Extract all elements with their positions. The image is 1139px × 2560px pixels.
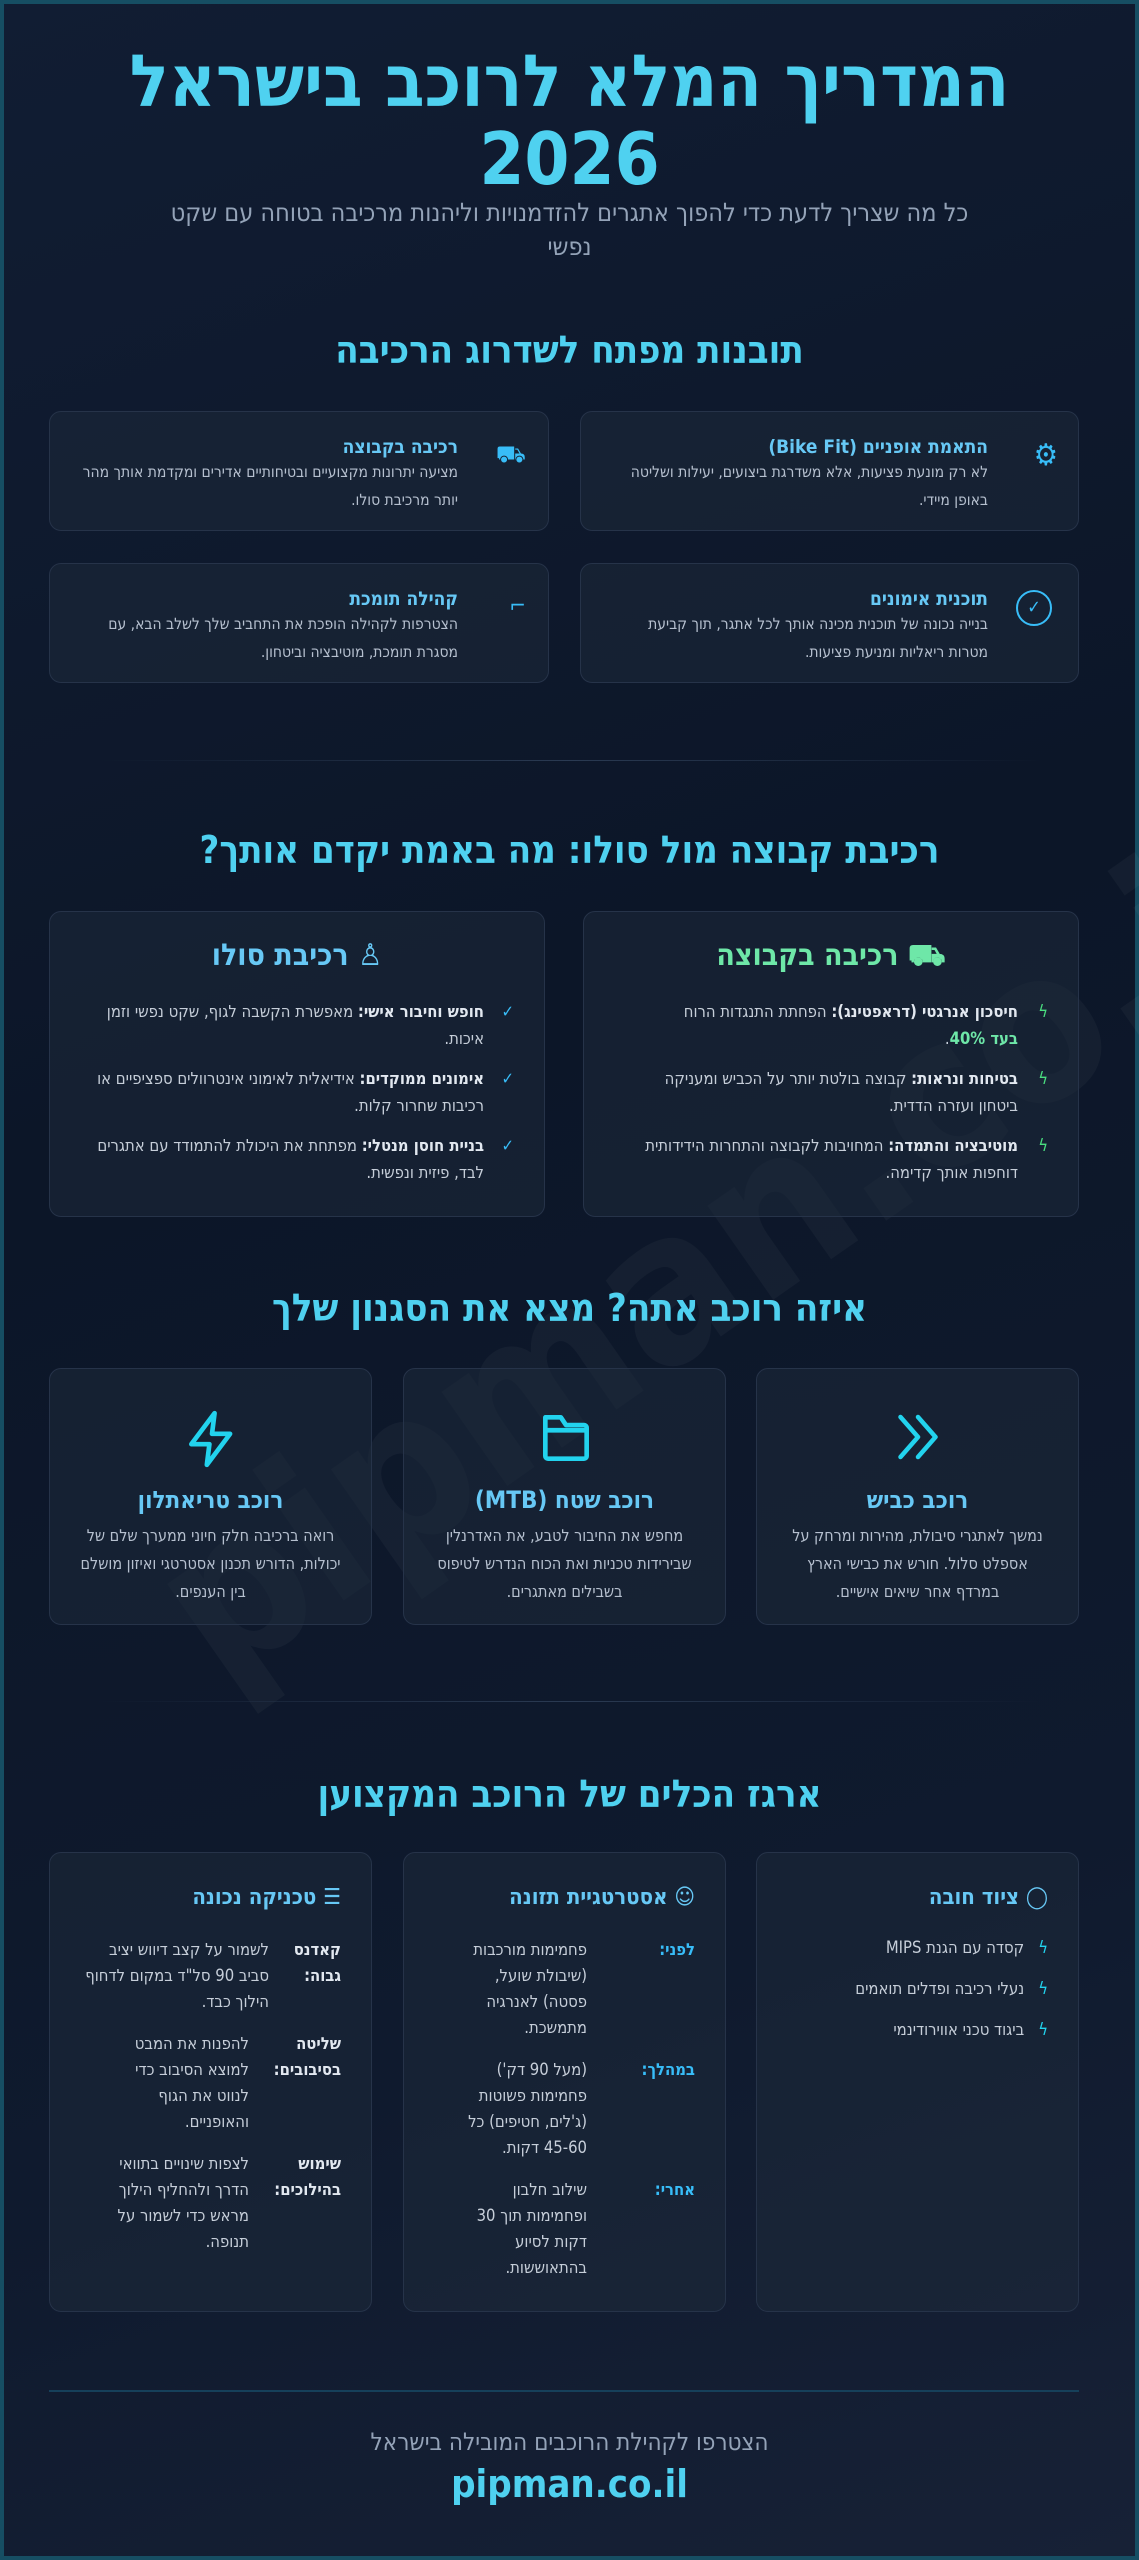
list: technique: לשמור על קצב דיווש יציב סביב 90 סל"ד במקום לדחוף הילוך כבד. — [85, 1940, 269, 2011]
list: technique: שליטה בסיבובים: — [274, 2034, 341, 2079]
heading: solo: ♙ רכיבת סולו — [212, 938, 382, 973]
list: group benefits: מוטיבציה והתמדה: המחויבות לקבוצה והתחרות הידידותית דוחפות אותך קדימה. — [645, 1136, 1018, 1182]
footer divider — [49, 2390, 1079, 2392]
list: technique — [85, 1940, 341, 2251]
list: nutrition — [468, 1940, 695, 2277]
card: bike fit — [580, 411, 1079, 531]
card: road rider — [756, 1368, 1079, 1625]
panel: solo riding — [49, 911, 545, 1217]
list: technique: לצפות שינויים בתוואי הדרך ולהחליף הילוך מראש כדי לשמור על תנופה. — [118, 2154, 249, 2251]
icon: check circle — [1016, 590, 1052, 626]
list: solo benefits: ✓ — [502, 1069, 514, 1088]
list: solo benefits: אימונים ממוקדים: אידיאלית לאימוני אינטרוולים ספציפיים או רכיבות שחרור קלות. — [97, 1069, 484, 1115]
list: group benefits: ϟ — [1038, 1002, 1048, 1021]
list: group benefits — [645, 1002, 1048, 1182]
card: MTB — [403, 1368, 726, 1625]
panel: group riding — [583, 911, 1079, 1217]
card: road rider: רוכב כביש — [867, 1486, 968, 1514]
icon: check circle: ✓ — [1027, 597, 1041, 618]
card: training plan: בנייה נכונה של תוכנית מכינה אותך לכל אתגר, תוך קביעת מטרות ריאליות ומניעת פציעות. — [648, 615, 988, 661]
icon: bike fit: ⚙ — [1034, 438, 1058, 473]
list: nutrition: אחרי: — [655, 2180, 695, 2199]
title — [130, 39, 1009, 201]
card: triathlon: רואה ברכיבה חלק חיוני ממערך שלם של יכולות, הדורש תכנון אסטרטגי ואיזון מושלם בין הענפים. — [80, 1526, 341, 1601]
list: gear: ϟביגוד טכני אווירודינמי — [893, 2020, 1048, 2039]
card: group riding: מציעה יתרונות מקצועיים ובטיחותיים אדירים ומקדמת אותך מהר יותר מרכיבת סולו. — [83, 463, 458, 509]
icon: bolt — [189, 1410, 232, 1468]
card: community — [49, 563, 549, 683]
list: group benefits: חיסכון אנרגטי (דראפטינג): הפחתת התנגדות הרוח — [684, 1002, 1018, 1021]
heading: insights: תובנות מפתח לשדרוג הרכיבה — [335, 328, 804, 372]
card: MTB: מחפש את החיבור לטבע, את האדרנלין שבירידות טכניות ואת הכוח הנדרש לטיפוס בשבילים מאתגרים. — [437, 1526, 692, 1601]
list: nutrition: במהלך: — [642, 2060, 695, 2079]
title: המדריך המלא לרוכב בישראל — [130, 39, 1009, 123]
card: MTB: רוכב שטח (MTB) — [475, 1486, 654, 1514]
list: technique: להפנות את המבט למוצא הסיבוב כדי לנווט את הגוף והאופניים. — [135, 2034, 249, 2131]
list: technique: שימוש בהילוכים: — [274, 2154, 341, 2199]
card: technique — [49, 1852, 372, 2312]
list: nutrition: שילוב חלבון ופחמימות תוך 30 דקות לסיוע בהתאוששות. — [477, 2180, 587, 2277]
list: solo benefits: ✓ — [502, 1002, 514, 1021]
icon: community: ⌐ — [509, 594, 526, 619]
heading: technique: ☰ טכניקה נכונה — [192, 1885, 341, 1910]
footer url: pipman.co.il — [451, 2462, 688, 2506]
list: solo benefits: ✓ — [502, 1136, 514, 1155]
heading: group vs solo: רכיבת קבוצה מול סולו: מה באמת יקדם אותך? — [200, 828, 939, 872]
list: group benefits: ϟ — [1038, 1136, 1048, 1155]
card: group riding: רכיבה בקבוצה — [343, 436, 458, 458]
card: triathlon — [49, 1368, 372, 1625]
list: technique: קאדנס גבוה: — [294, 1940, 341, 1985]
list: solo benefits — [97, 1002, 514, 1182]
footer text: הצטרפו לקהילת הרוכבים המובילה בישראל — [371, 2428, 768, 2456]
heading: rider type: איזה רוכב אתה? מצא את הסגנון שלך — [272, 1286, 867, 1330]
list: gear: ϟנעלי רכיבה ופדלים תואמים — [855, 1979, 1048, 1998]
card: bike fit: לא רק מונעת פציעות, אלא משדרגת ביצועים, יעילות ושליטה באופן מיידי. — [631, 463, 988, 509]
card: nutrition — [403, 1852, 726, 2312]
card: group riding — [49, 411, 549, 531]
subtitle: כל מה שצריך לדעת כדי להפוך אתגרים להזדמנויות וליהנות מרכיבה בטוחה עם שקט נפשי — [171, 198, 968, 261]
heading: toolkit: ארגז הכלים של הרוכב המקצוען — [318, 1772, 821, 1816]
list: nutrition: (מעל 90 דק') פחמימות פשוטות (ג'לים, חטיפים) כל 45-60 דקות. — [468, 2060, 587, 2157]
card: training plan: תוכנית אימונים — [870, 588, 988, 610]
card: training plan — [580, 563, 1079, 683]
heading: group: ⛟ רכיבה בקבוצה — [716, 938, 946, 973]
list: nutrition: פחמימות מורכבות (שיבולת שועל, פסטה) לאנרגיה מתמשכת. — [473, 1940, 587, 2037]
icon: group: ⛟ — [496, 440, 526, 468]
icon: folder — [543, 1415, 589, 1461]
list: group benefits: ϟ — [1038, 1069, 1048, 1088]
card: bike fit: התאמת אופניים (Bike Fit) — [768, 436, 988, 458]
card: road rider: נמשך לאתגרי סיבולת, מהירות ומרחק על אספלט סלול. חורש את כבישי הארץ במרדף אחר שיאים אישיים. — [792, 1526, 1043, 1601]
icon: chevrons — [898, 1414, 938, 1460]
list: solo benefits: בניית חוסן מנטלי: מפתחת את היכולת להתמודד עם אתגרים לבד, פיזית ונפשית. — [97, 1136, 484, 1182]
list: group benefits: בטיחות ונראות: קבוצה בולטת יותר על הכביש ומעניקה ביטחון ועזרה הדדית. — [665, 1069, 1018, 1115]
list: gear: ϟקסדה עם הגנת MIPS — [886, 1938, 1048, 1957]
heading: gear: ◯ ציוד חובה — [929, 1885, 1048, 1910]
list: nutrition: לפני: — [659, 1940, 695, 1959]
title: 2026 — [479, 117, 660, 201]
list: group benefits: בעד 40%. — [945, 1029, 1018, 1048]
card: community: קהילה תומכת — [349, 588, 458, 610]
heading: nutrition: ☺ אסטרטגיית תזונה — [509, 1885, 695, 1910]
card: community: הצטרפות לקהילה הופכת את התחביב שלך לשלב הבא, עם מסגרת תומכת, מוטיבציה וביטחון. — [108, 615, 458, 661]
card: mandatory gear — [756, 1852, 1079, 2312]
list: solo benefits: חופש וחיבור אישי: מאפשרת הקשבה לגוף, שקט נפשי וזמן איכות. — [107, 1002, 484, 1048]
card: triathlon: רוכב טריאתלון — [138, 1486, 283, 1514]
list: gear — [855, 1938, 1048, 2039]
